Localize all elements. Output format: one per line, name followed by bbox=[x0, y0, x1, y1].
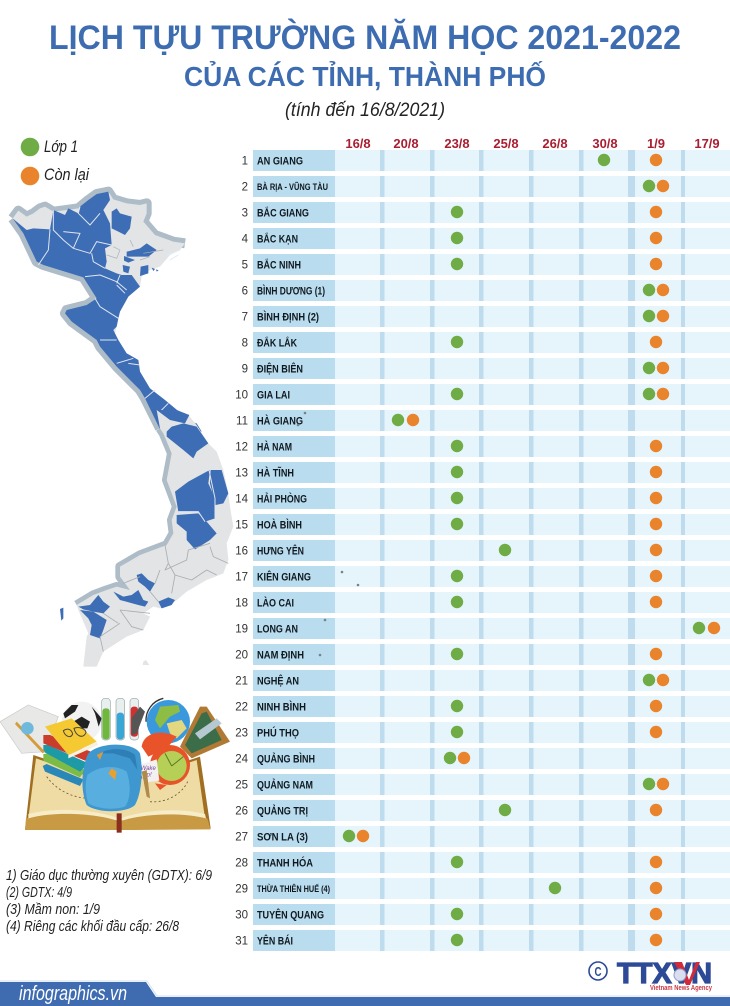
illustration: open book with school items bbox=[0, 698, 230, 833]
row 16 Hưng Yên: 16 bbox=[235, 546, 248, 558]
row 31 Yên Bái bbox=[235, 930, 730, 951]
row 4 Bắc Kạn: BẮC KẠN bbox=[257, 232, 298, 246]
row 18 Lào Cai bbox=[235, 592, 730, 613]
map of Vietnam bbox=[13, 192, 233, 667]
row 14 Hải Phòng: HẢI PHÒNG bbox=[257, 492, 307, 506]
icon: football bbox=[62, 702, 102, 742]
row 26 Quảng Trị: 26 bbox=[235, 806, 248, 818]
footer band bbox=[0, 981, 730, 1006]
row 31 Yên Bái: YÊN BÁI bbox=[257, 934, 293, 948]
row 14 Hải Phòng bbox=[235, 488, 730, 509]
row 15 Hoà Bình: HOÀ BÌNH bbox=[257, 518, 302, 532]
row 29 Thừa Thiên Huế bbox=[235, 878, 730, 899]
row 31 Yên Bái: 31 bbox=[235, 936, 248, 948]
row 22 Ninh Bình: 22 bbox=[235, 702, 248, 714]
date column headers: 23/8 bbox=[444, 136, 470, 151]
row 23 Phú Thọ: PHÚ THỌ bbox=[257, 726, 299, 740]
icon: backpack bbox=[82, 745, 150, 811]
row 25 Quảng Nam bbox=[235, 774, 730, 795]
row 9 Điện Biên bbox=[242, 358, 730, 379]
row 25 Quảng Nam: 25 bbox=[235, 780, 248, 792]
icon: blackboard bbox=[180, 707, 230, 758]
row 14 Hải Phòng: 14 bbox=[235, 494, 249, 506]
row 21 Nghệ An bbox=[235, 670, 730, 691]
row 26 Quảng Trị: QUẢNG TRỊ bbox=[257, 804, 308, 818]
row 16 Hưng Yên: HƯNG YÊN bbox=[257, 544, 304, 558]
row 19 Long An: 19 bbox=[235, 624, 248, 636]
footnotes: (4) Riêng các khối đầu cấp: 26/8 bbox=[6, 919, 179, 935]
row 10 Gia Lai: 10 bbox=[235, 390, 248, 402]
row 24 Quảng Bình bbox=[235, 748, 730, 769]
row 30 Tuyên Quang: 30 bbox=[235, 910, 248, 922]
row 15 Hoà Bình: 15 bbox=[235, 520, 248, 532]
row 3 Bắc Giang: 3 bbox=[242, 208, 248, 220]
icon: note paper bbox=[139, 759, 159, 783]
row 1 An Giang: 1 bbox=[242, 156, 248, 168]
date column headers: 17/9 bbox=[694, 136, 720, 151]
date note: (tính đến 16/8/2021) bbox=[285, 100, 445, 121]
row 23 Phú Thọ: 23 bbox=[235, 728, 248, 740]
logo: TTXVN: C bbox=[594, 964, 602, 979]
row 3 Bắc Giang: BẮC GIANG bbox=[257, 206, 309, 220]
footnotes: (2) GDTX: 4/9 bbox=[6, 885, 72, 901]
legend: Còn lại bbox=[44, 165, 90, 184]
row 5 Bắc Ninh: 5 bbox=[242, 260, 248, 272]
logo: TTXVN: TTXVN bbox=[617, 958, 712, 990]
row 12 Hà Nam: HÀ NAM bbox=[257, 440, 292, 454]
row 29 Thừa Thiên Huế: THỪA THIÊN HUẾ (4) bbox=[257, 883, 330, 894]
row 6 Bình Dương bbox=[242, 280, 730, 301]
row 19 Long An: LONG AN bbox=[257, 624, 298, 636]
row 30 Tuyên Quang: TUYÊN QUANG bbox=[257, 908, 324, 922]
date column headers: 26/8 bbox=[542, 136, 568, 151]
date column headers: 25/8 bbox=[493, 136, 519, 151]
row 11 Hà Giang bbox=[236, 410, 730, 431]
row 7 Bình Định bbox=[242, 306, 730, 327]
row 17 Kiên Giang: 17 bbox=[235, 572, 248, 584]
row 8 Đắk Lắk bbox=[242, 332, 730, 353]
row 26 Quảng Trị bbox=[235, 800, 730, 821]
icon: note paper: Wake bbox=[141, 766, 157, 772]
row 18 Lào Cai: 18 bbox=[235, 598, 248, 610]
row 23 Phú Thọ bbox=[235, 722, 730, 743]
row 13 Hà Tĩnh bbox=[235, 462, 730, 483]
map: northern part bbox=[13, 192, 202, 432]
footer band: infographics.vn bbox=[19, 983, 127, 1005]
row 19 Long An bbox=[235, 618, 730, 639]
row 20 Nam Định: NAM ĐỊNH bbox=[257, 650, 304, 662]
row 13 Hà Tĩnh: 13 bbox=[235, 468, 248, 480]
row 8 Đắk Lắk: ĐẮK LẮK bbox=[257, 336, 297, 350]
icon: stack of books bbox=[43, 718, 98, 786]
row 2 Bà Rịa - Vũng Tàu: 2 bbox=[242, 182, 248, 194]
footnotes: 1) Giáo dục thường xuyên (GDTX): 6/9 bbox=[6, 868, 212, 884]
row 4 Bắc Kạn: 4 bbox=[242, 234, 249, 246]
row 24 Quảng Bình: 24 bbox=[235, 754, 249, 766]
row 24 Quảng Bình: QUẢNG BÌNH bbox=[257, 752, 315, 766]
footnotes: (3) Mầm non: 1/9 bbox=[6, 902, 100, 918]
row 5 Bắc Ninh: BẮC NINH bbox=[257, 258, 301, 272]
row 2 Bà Rịa - Vũng Tàu: BÀ RỊA - VŨNG TÀU bbox=[257, 182, 328, 192]
row 30 Tuyên Quang bbox=[235, 904, 730, 925]
date column headers: 1/9 bbox=[647, 136, 665, 151]
row 28 Thanh Hóa: 28 bbox=[235, 858, 248, 870]
icon: alarm clock bbox=[142, 733, 190, 790]
date column headers bbox=[345, 136, 720, 151]
row 7 Bình Định: 7 bbox=[242, 312, 248, 324]
row 10 Gia Lai: GIA LAI bbox=[257, 390, 290, 402]
row 6 Bình Dương: BÌNH DƯƠNG (1) bbox=[257, 284, 325, 298]
icon: test tubes bbox=[102, 698, 145, 740]
row 27 Sơn La: SƠN LA (3) bbox=[257, 832, 308, 844]
row 9 Điện Biên: 9 bbox=[242, 364, 248, 376]
date column headers: 30/8 bbox=[592, 136, 618, 151]
icon: rolled paper bbox=[0, 705, 58, 753]
date column headers: 16/8 bbox=[345, 136, 371, 151]
logo: TTXVN: Vietnam News Agency bbox=[650, 985, 712, 992]
row 8 Đắk Lắk: 8 bbox=[242, 338, 248, 350]
row 17 Kiên Giang bbox=[235, 566, 730, 587]
legend bbox=[21, 137, 90, 185]
row 28 Thanh Hóa: THANH HÓA bbox=[257, 856, 313, 870]
row 2 Bà Rịa - Vũng Tàu bbox=[242, 176, 730, 197]
row 15 Hoà Bình bbox=[235, 514, 730, 535]
row 22 Ninh Bình bbox=[235, 696, 730, 717]
schedule table bbox=[235, 150, 730, 951]
subtitle: CỦA CÁC TỈNH, THÀNH PHỐ bbox=[184, 60, 546, 92]
row 1 An Giang: AN GIANG bbox=[257, 156, 303, 168]
icon: book bbox=[25, 755, 211, 833]
title: LỊCH TỰU TRƯỜNG NĂM HỌC 2021-2022 bbox=[49, 19, 681, 57]
row 16 Hưng Yên bbox=[235, 540, 730, 561]
row 12 Hà Nam: 12 bbox=[235, 442, 248, 454]
row 11 Hà Giang: HÀ GIANG bbox=[257, 414, 303, 428]
row 11 Hà Giang: 11 bbox=[236, 416, 248, 428]
row 6 Bình Dương: 6 bbox=[242, 286, 248, 298]
row 1 An Giang bbox=[242, 150, 730, 171]
row 29 Thừa Thiên Huế: 29 bbox=[235, 884, 248, 896]
icon: note paper: up! bbox=[143, 773, 152, 779]
row 9 Điện Biên: ĐIỆN BIÊN bbox=[257, 362, 303, 376]
icon: globe bbox=[146, 698, 190, 743]
row 12 Hà Nam bbox=[235, 436, 730, 457]
row 21 Nghệ An: NGHỆ AN bbox=[257, 674, 299, 688]
row 3 Bắc Giang bbox=[242, 202, 730, 223]
row 27 Sơn La bbox=[235, 826, 730, 847]
icon: magnifier and pencil bbox=[15, 722, 45, 753]
row 10 Gia Lai bbox=[235, 384, 730, 405]
date column headers: 20/8 bbox=[393, 136, 419, 151]
row 17 Kiên Giang: KIÊN GIANG bbox=[257, 570, 311, 584]
row 22 Ninh Bình: NINH BÌNH bbox=[257, 700, 306, 714]
row 20 Nam Định bbox=[235, 644, 730, 665]
row 13 Hà Tĩnh: HÀ TĨNH bbox=[257, 466, 294, 480]
map: southern part bbox=[60, 410, 233, 667]
footnotes bbox=[6, 868, 212, 935]
row 4 Bắc Kạn bbox=[242, 228, 730, 249]
row 7 Bình Định: BÌNH ĐỊNH (2) bbox=[257, 310, 319, 324]
row 27 Sơn La: 27 bbox=[235, 832, 248, 844]
row 5 Bắc Ninh bbox=[242, 254, 730, 275]
row 25 Quảng Nam: QUẢNG NAM bbox=[257, 778, 313, 792]
legend: Lớp 1 bbox=[44, 137, 78, 156]
row 21 Nghệ An: 21 bbox=[235, 676, 248, 688]
row 28 Thanh Hóa bbox=[235, 852, 730, 873]
row 18 Lào Cai: LÀO CAI bbox=[257, 596, 294, 610]
row 20 Nam Định: 20 bbox=[235, 650, 248, 662]
